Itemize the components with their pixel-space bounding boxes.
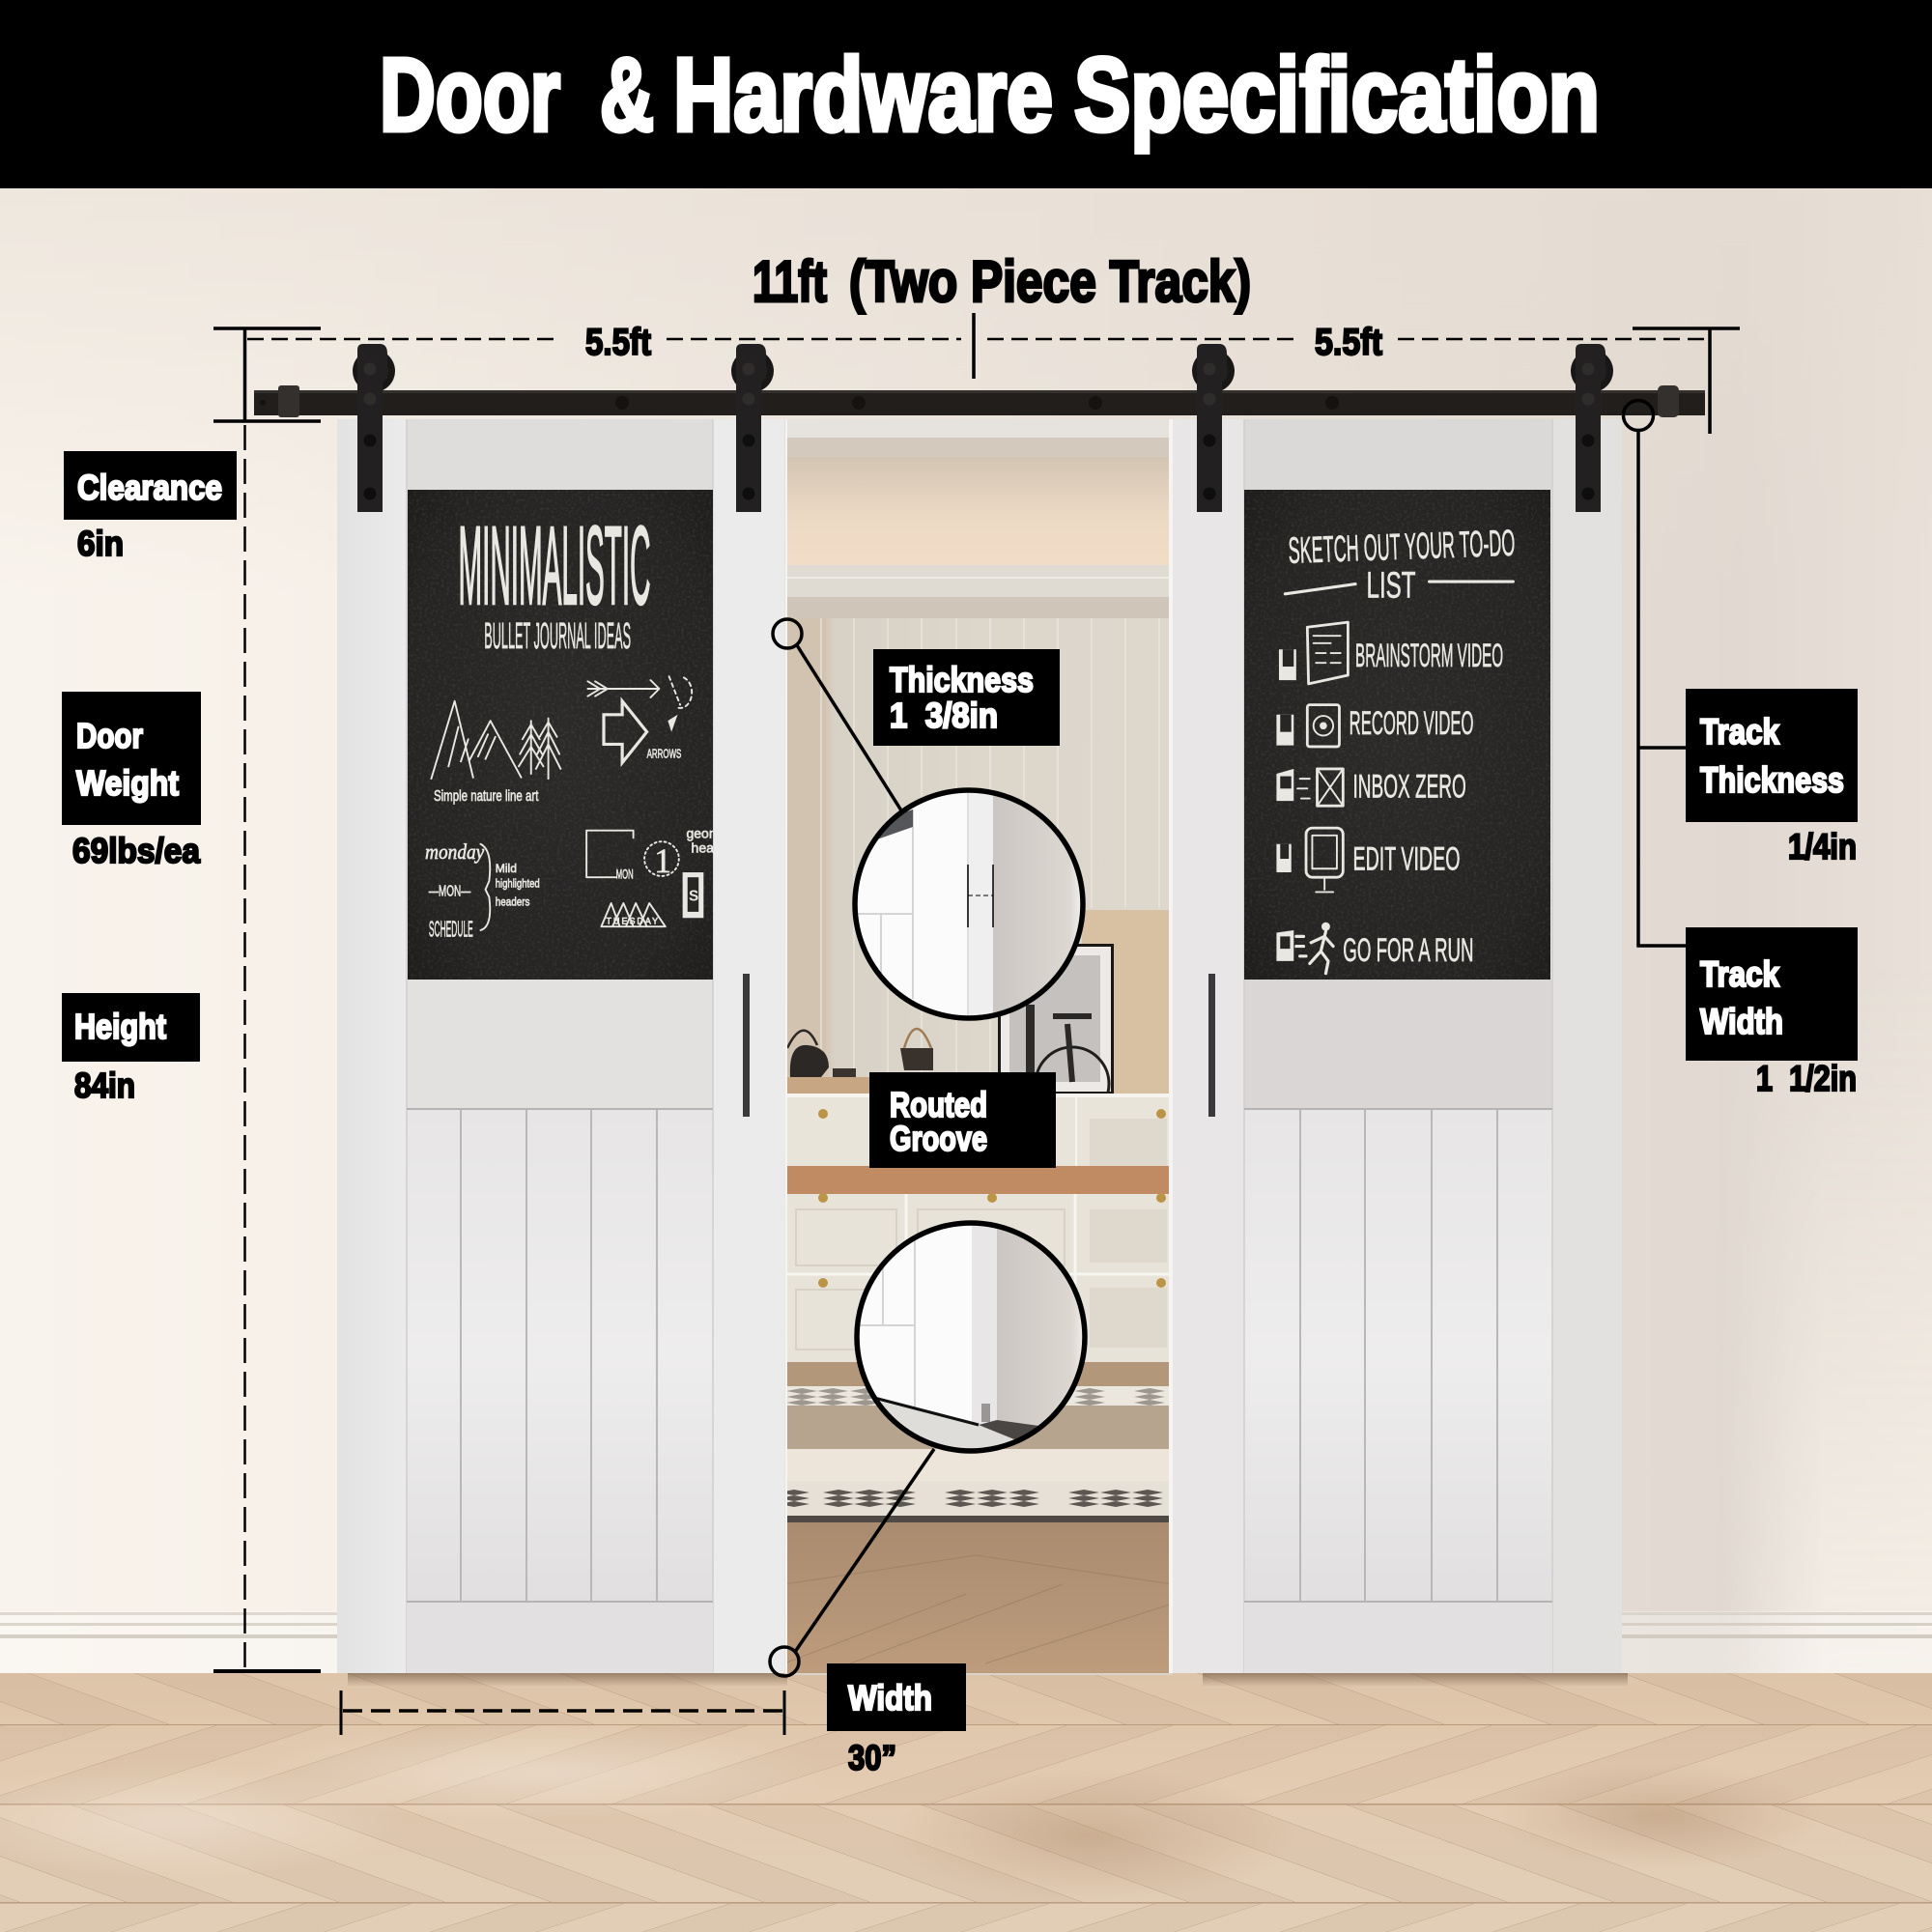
chalk drawing: minimalistic bullet journal: SCHEDULE — [429, 916, 473, 941]
label: right half track: 5.5ft — [1315, 322, 1382, 363]
chalk drawing: minimalistic bullet journal: MON — [616, 866, 634, 881]
chalk drawing: minimalistic bullet journal: highlighted — [496, 876, 540, 890]
track thickness callout: Thickness — [1700, 760, 1844, 800]
title: Hardware — [673, 36, 1053, 153]
thickness callout: 1 3/8in — [890, 696, 998, 735]
clearance callout — [64, 451, 237, 563]
chalk drawing: minimalistic bullet journal: ARROWS — [647, 746, 681, 760]
width callout: 30” — [848, 1738, 896, 1777]
chalk drawing: to-do list: EDIT VIDEO — [1353, 841, 1460, 878]
text: SKETCH OUT YOUR TO-DO — [1288, 523, 1516, 572]
chalk drawing: to-do list — [1276, 523, 1516, 974]
framed bicycle photo — [998, 944, 1114, 1121]
dimension line: door width — [341, 1690, 784, 1735]
door weight callout — [62, 692, 201, 870]
clearance callout: Clearance — [77, 468, 222, 507]
hanger straps and wheels — [353, 344, 1613, 512]
chalk drawing: minimalistic bullet journal: BULLET JOURNAL IDEAS — [484, 615, 631, 657]
track pointer — [1623, 400, 1686, 946]
baseboard — [0, 1611, 1932, 1673]
door thickness pointer — [773, 619, 901, 810]
dimension lines: track — [213, 313, 1740, 434]
title: Specification — [1074, 36, 1600, 153]
chalk drawing: minimalistic bullet journal: monday — [425, 840, 485, 864]
title: Door — [380, 36, 560, 153]
track width callout — [1686, 927, 1858, 1098]
height callout: 84in — [74, 1065, 135, 1105]
magnifier: door thickness — [855, 790, 1087, 1020]
track width callout: Track — [1700, 954, 1779, 994]
track width callout: 1 1/2in — [1756, 1059, 1857, 1098]
chalk drawing: minimalistic bullet journal: 1 — [654, 841, 671, 880]
door weight callout: 69lbs/ea — [72, 831, 201, 870]
width callout: Width — [848, 1678, 932, 1718]
thickness callout: Thickness — [890, 660, 1034, 699]
clearance callout: 6in — [77, 524, 124, 563]
track thickness callout — [1686, 689, 1858, 867]
wooden countertop — [784, 1166, 1173, 1194]
door weight callout: Door — [76, 716, 143, 755]
text: MINIMALISTIC — [458, 504, 650, 628]
chalkboard right — [1244, 490, 1550, 980]
track length heading: 11ft — [753, 249, 827, 314]
herringbone wood floor — [0, 1673, 1932, 1932]
backsplash — [1082, 910, 1173, 1094]
routed groove callout: Routed — [890, 1085, 987, 1124]
door handle — [1208, 974, 1215, 1117]
barn door track — [254, 385, 1705, 417]
track width callout: Width — [1700, 1002, 1783, 1041]
chalk drawing: minimalistic bullet journal — [425, 525, 713, 937]
chalk drawing: minimalistic bullet journal: Simple nature line art — [434, 788, 539, 805]
title — [380, 36, 1600, 153]
track length heading: (Two Piece Track) — [849, 249, 1251, 314]
chalk drawing: to-do list: GO FOR A RUN — [1343, 932, 1474, 969]
chalk drawing: minimalistic bullet journal: head — [692, 840, 722, 856]
chalk drawing: minimalistic bullet journal: —MON— — [429, 883, 471, 899]
height callout: Height — [74, 1007, 166, 1046]
text: BRAINSTORM VIDEO — [1355, 638, 1503, 674]
patterned rug — [779, 1386, 1173, 1522]
track length heading — [753, 249, 1251, 314]
header bar — [0, 0, 1932, 188]
door weight callout: Weight — [76, 763, 179, 803]
left door — [337, 419, 785, 1673]
track thickness callout: 1/4in — [1788, 827, 1857, 867]
chalk drawing: to-do list: LIST — [1367, 565, 1416, 607]
chalk drawing: minimalistic bullet journal: geome — [686, 825, 728, 840]
door handle — [743, 974, 750, 1117]
lower cabinets — [784, 1193, 1173, 1362]
magnifier: routed groove — [855, 1222, 1087, 1454]
chalk drawing: minimalistic bullet journal: S — [689, 888, 698, 904]
thickness callout — [873, 649, 1060, 746]
label: left half track: 5.5ft — [585, 322, 651, 363]
interior room scene through opening — [779, 419, 1173, 1675]
chalk drawing: to-do list: INBOX ZERO — [1353, 768, 1466, 805]
wall background — [0, 188, 1932, 1681]
track bolts — [260, 396, 1339, 410]
track end stops — [278, 385, 1679, 417]
width callout — [827, 1663, 966, 1777]
title: & — [600, 36, 654, 153]
groove pointer — [770, 1449, 934, 1676]
height callout — [62, 993, 200, 1105]
tea kettles on wood tray — [785, 1029, 933, 1094]
track thickness callout: Track — [1700, 712, 1779, 752]
right door — [1173, 419, 1622, 1673]
chalk drawing: to-do list: RECORD VIDEO — [1350, 705, 1474, 742]
routed groove callout: Groove — [890, 1119, 987, 1158]
routed groove callout — [869, 1072, 1056, 1168]
upper cabinets — [784, 1094, 1173, 1167]
chalk drawing: minimalistic bullet journal: headers — [496, 895, 529, 908]
dimension line: height — [213, 425, 321, 1671]
chalk drawing: minimalistic bullet journal: TUESDAY — [607, 917, 658, 926]
chalkboard left — [408, 490, 713, 980]
chalk drawing: minimalistic bullet journal: Mild — [496, 862, 517, 875]
